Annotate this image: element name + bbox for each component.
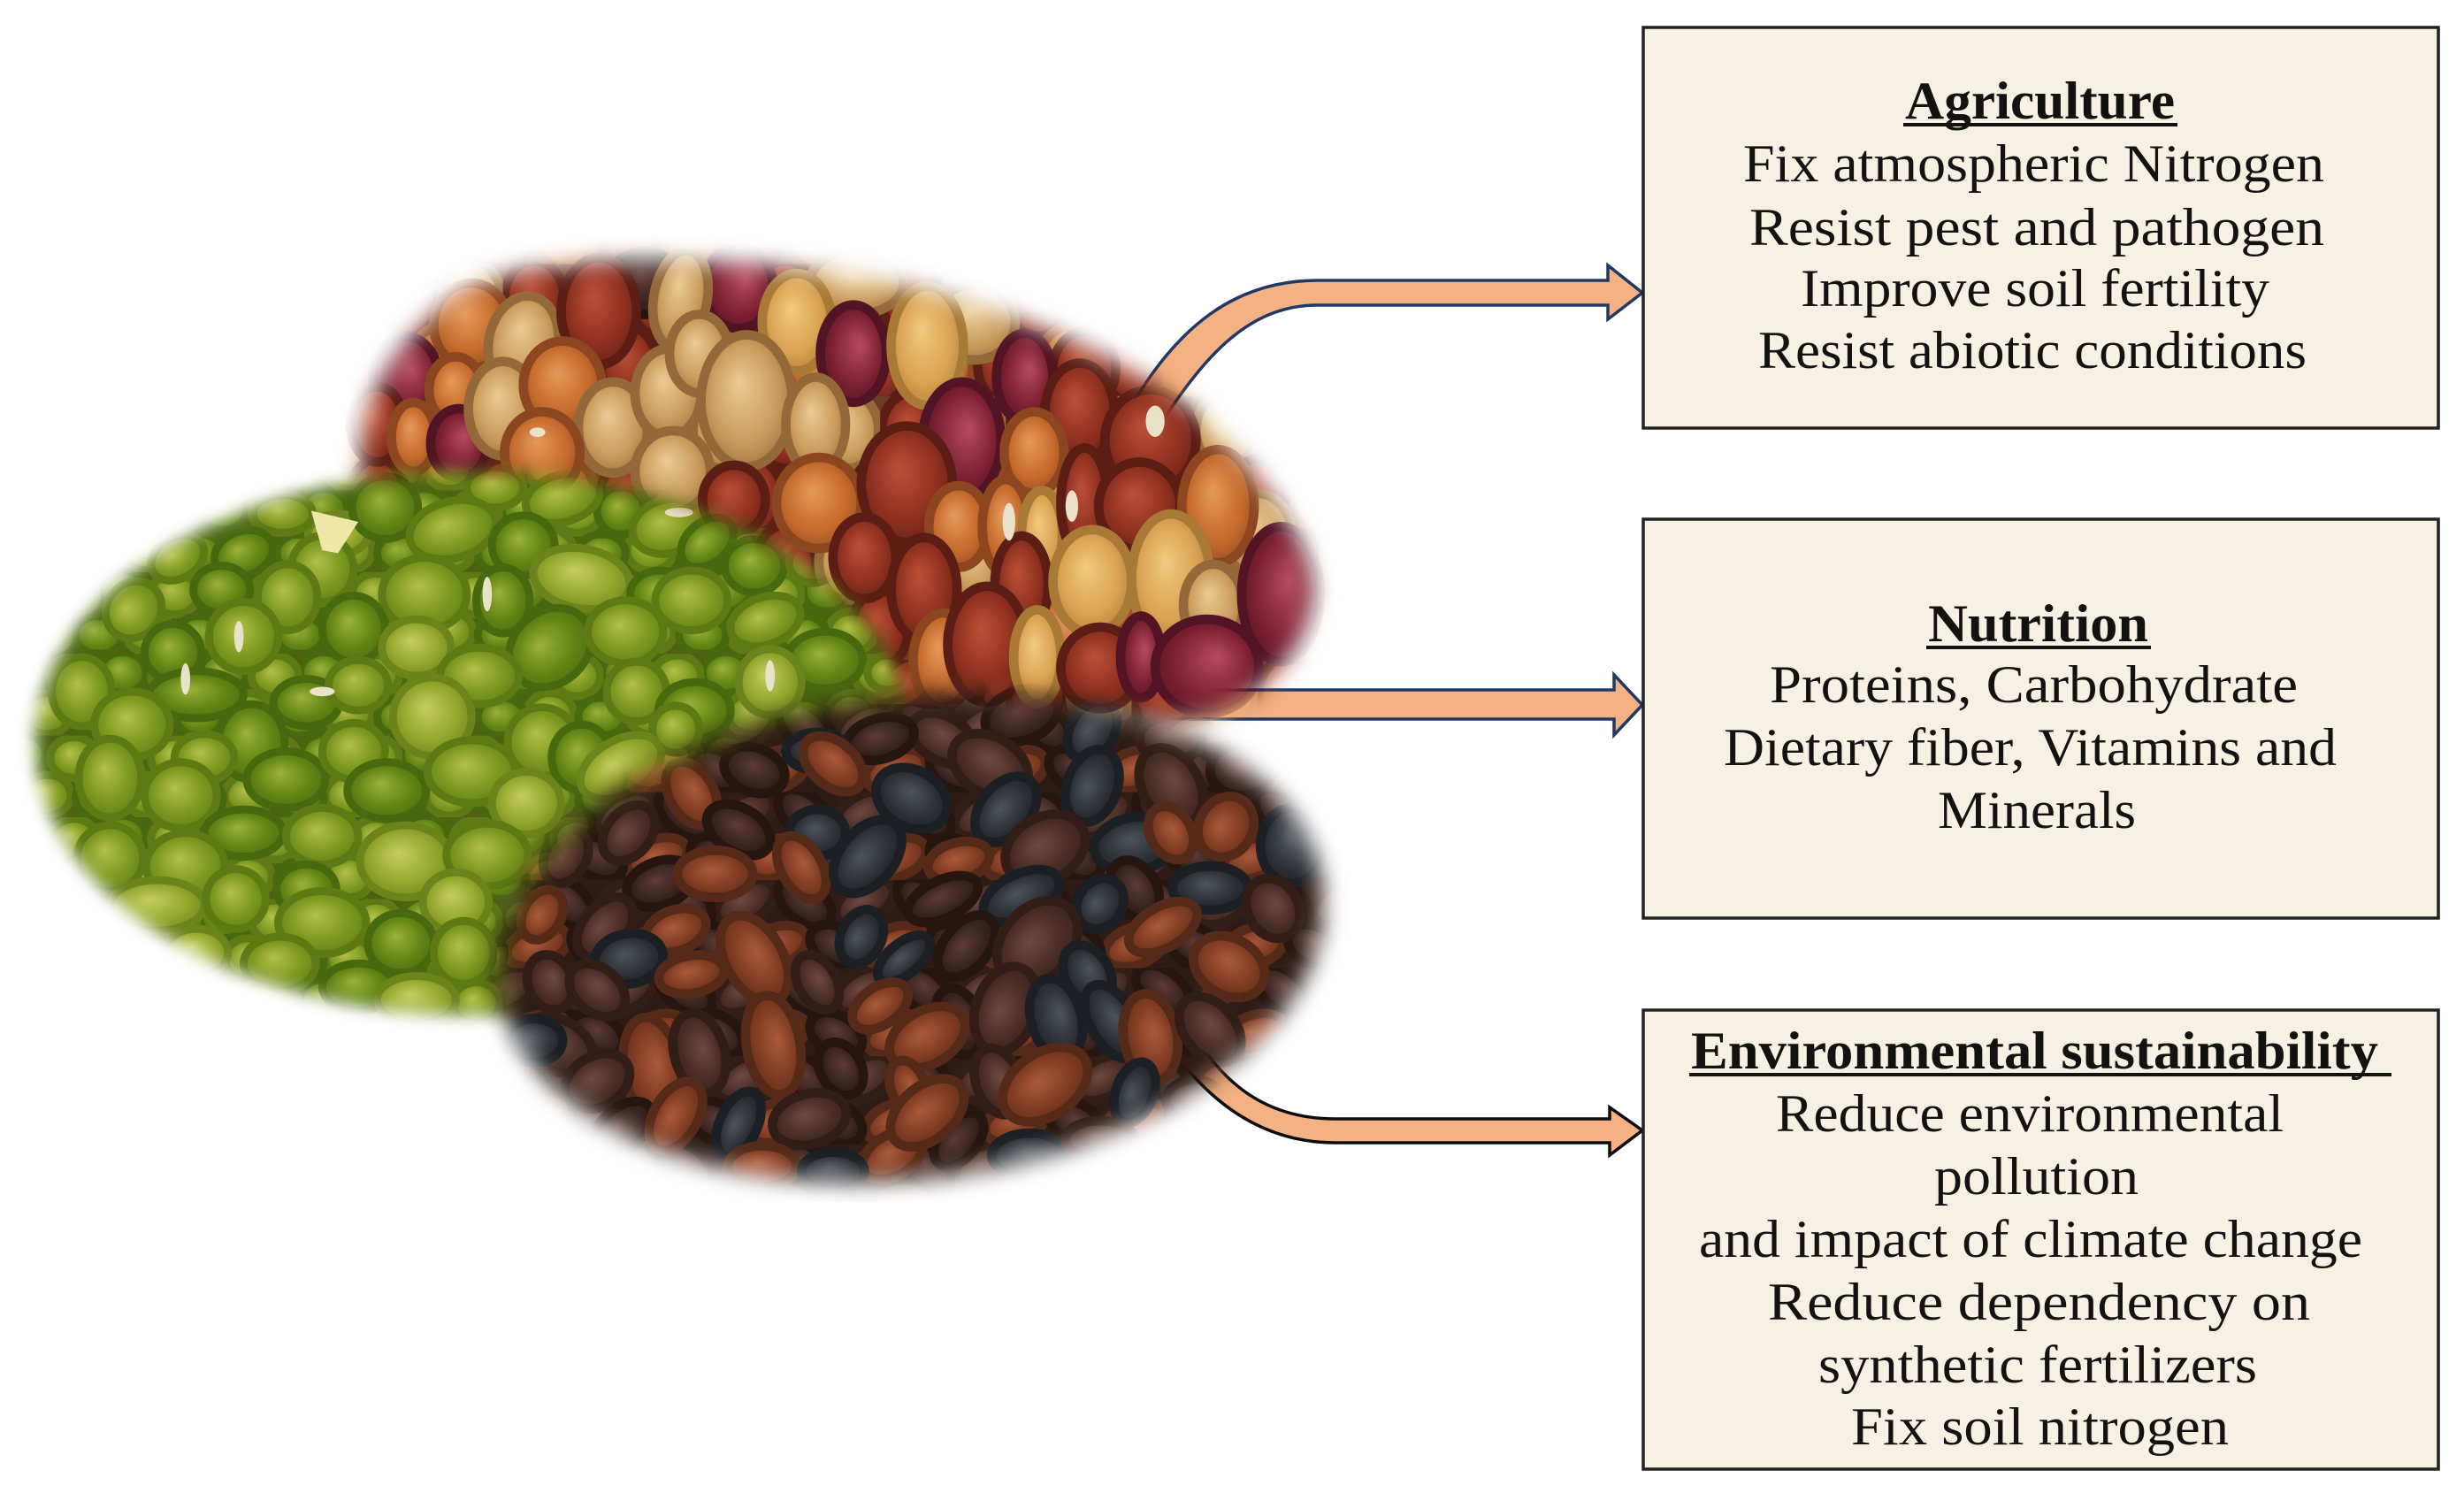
nutrition heading: Nutrition bbox=[1928, 594, 2148, 653]
environmental sustainability text: pollution bbox=[1934, 1147, 2139, 1206]
photo: green mung beans bbox=[16, 448, 943, 1045]
agriculture text: Fix atmospheric Nitrogen bbox=[1743, 134, 2324, 193]
agriculture box bbox=[1643, 27, 2438, 428]
panel: nutrition bbox=[1643, 519, 2438, 918]
nutrition text bbox=[1724, 655, 2337, 839]
nutrition text: Minerals bbox=[1938, 781, 2136, 839]
panel: environmental sustainability bbox=[1643, 1010, 2438, 1469]
environmental sustainability text: and impact of climate change bbox=[1699, 1210, 2362, 1268]
agriculture text: Resist abiotic conditions bbox=[1758, 321, 2307, 379]
arrow: beans to agriculture bbox=[1123, 265, 1642, 442]
environmental sustainability text: synthetic fertilizers bbox=[1818, 1336, 2257, 1394]
environmental sustainability text: Fix soil nitrogen bbox=[1851, 1397, 2229, 1456]
environmental sustainability text: Reduce dependency on bbox=[1768, 1273, 2310, 1331]
agriculture text bbox=[1743, 134, 2324, 379]
arrow: beans to nutrition bbox=[1150, 675, 1642, 735]
agriculture heading: Agriculture bbox=[1905, 72, 2175, 130]
arrow: beans to environmental sustainability bbox=[1159, 1004, 1642, 1155]
photo: mixed tan and red beans bbox=[330, 236, 1351, 739]
environmental sustainability heading: Environmental sustainability bbox=[1691, 1022, 2378, 1080]
environmental sustainability text: Reduce environmental bbox=[1776, 1084, 2284, 1143]
environmental sustainability box bbox=[1643, 1010, 2438, 1469]
agriculture text: Improve soil fertility bbox=[1801, 259, 2269, 318]
nutrition box bbox=[1643, 519, 2438, 918]
nutrition text: Proteins, Carbohydrate bbox=[1770, 655, 2298, 714]
nutrition text: Dietary fiber, Vitamins and bbox=[1724, 718, 2337, 777]
panel: agriculture bbox=[1643, 27, 2438, 428]
agriculture text: Resist pest and pathogen bbox=[1749, 198, 2324, 256]
photo: dark brown and black beans bbox=[471, 668, 1351, 1202]
environmental sustainability text bbox=[1699, 1084, 2362, 1456]
